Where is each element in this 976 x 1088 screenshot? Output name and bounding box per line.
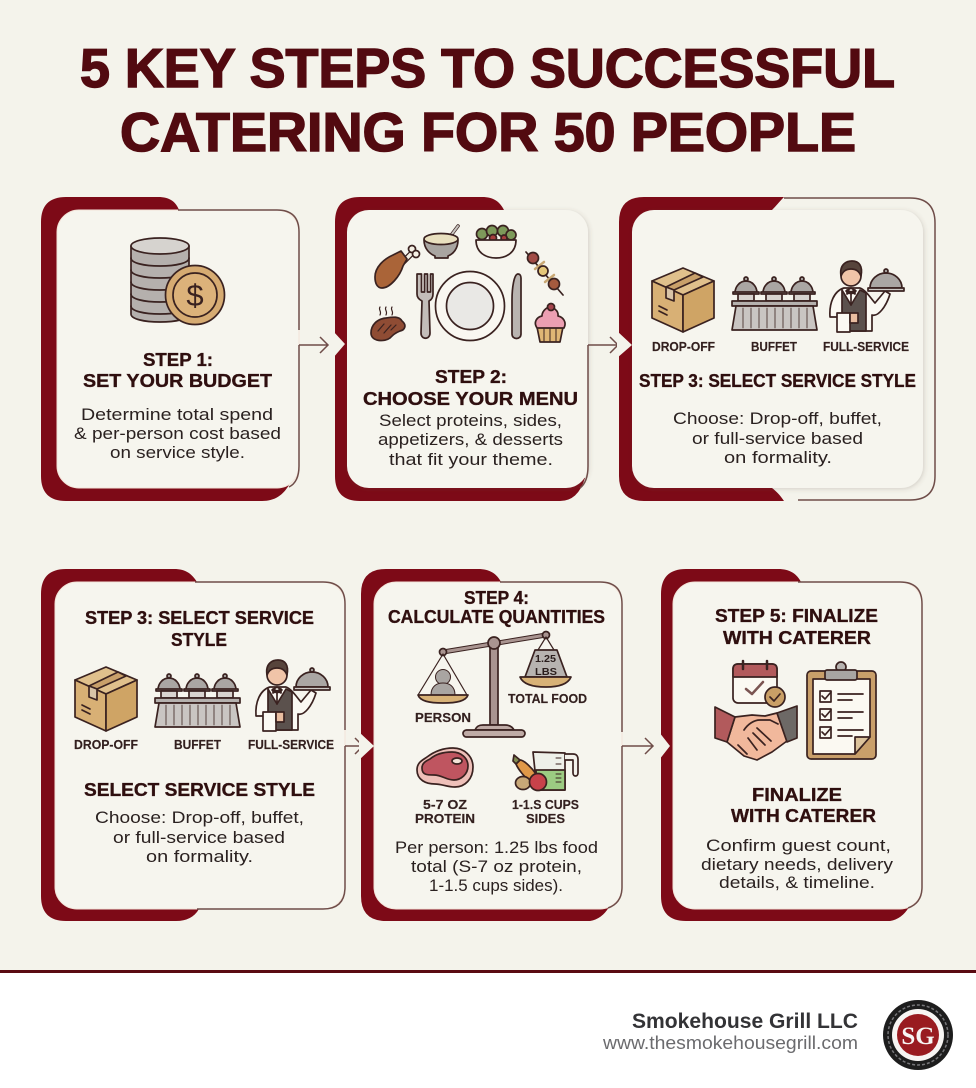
text: step 1 description: & per-person cost based [74,424,281,443]
text: company name: Smokehouse Grill LLC [632,1010,858,1033]
text: step 4 description: 1-1.5 cups sides). [429,876,563,895]
text: service style description: on formality. [146,847,253,866]
icon: skewer [526,252,563,295]
text: step 4 description: Per person: 1.25 lbs food [395,838,598,857]
heading: select service style: SELECT SERVICE STYLE [84,779,315,800]
heading: step 2: CHOOSE YOUR MENU [363,388,578,409]
heading: step 4: CALCULATE QUANTITIES [388,606,605,627]
text: step 4 description [395,838,598,895]
text: step 2 description [378,411,563,469]
text: service style description: Choose: Drop-off, buffet, [95,808,304,827]
heading: step 4: STEP 4: [464,587,529,608]
labels: service types: FULL-SERVICE [823,340,909,354]
heading: step 3 repeated: STYLE [171,629,227,650]
icon: knife [512,274,521,338]
panel: step 2 choose your menu [333,197,588,501]
labels: protein and sides: PROTEIN [415,812,475,826]
labels: protein and sides: 1-1.S CUPS [512,798,579,812]
icon: drop-off box [75,667,137,731]
labels: protein and sides: 5-7 OZ [423,798,467,812]
text: website: www.thesmokehousegrill.com [602,1033,858,1053]
heading: finalize with caterer [731,784,876,826]
labels: service types: BUFFET [174,738,221,752]
icon: coin stack: $ [186,278,204,313]
text: weight label [535,653,557,678]
arrow: step 2 to step 3 [588,337,618,353]
panel: step 5 finalize with caterer [659,569,922,921]
panel: step 3 select service style, bottom [41,569,345,921]
labels: protein and sides [415,798,579,826]
labels: service types: DROP-OFF [74,738,138,752]
icon: drop-off box [652,268,714,332]
text: step 5 description: details, & timeline. [719,873,875,892]
heading: step 2: STEP 2: [435,366,507,387]
text: step 4 description: total (S-7 oz protein, [411,857,582,876]
text: step 3 description [673,409,882,467]
text: step 5 description [701,836,894,892]
text: step 2 description: Select proteins, sides, [379,411,562,430]
heading: step 4 [388,587,605,627]
icon: buffet table [732,277,817,330]
icon: cupcake [535,304,565,342]
text: step 3 description: Choose: Drop-off, buffet, [673,409,882,428]
icon: steak [371,307,405,341]
arrow: service style to step 4 [345,738,363,754]
text: step 3 description: on formality. [724,448,832,467]
text: step 1 description: Determine total spend [81,405,273,424]
arrow: step 1 to step 2 [299,337,328,353]
title [80,37,895,163]
heading: step 3 repeated [85,607,314,650]
labels: service types: BUFFET [751,340,797,354]
icon: balance scale [418,632,571,737]
text: service style description [95,808,304,866]
heading: finalize with caterer: WITH CATERER [731,805,876,826]
text: step 2 description: that fit your theme. [389,450,553,469]
icon: handshake [715,706,797,760]
labels: service types [652,340,909,354]
text: step 1 description [74,405,281,462]
heading: step 1: SET YOUR BUDGET [83,370,273,391]
icon: company logo [883,1000,953,1070]
labels: service types: DROP-OFF [652,340,715,354]
label: total food: TOTAL FOOD [508,692,587,706]
heading: finalize with caterer: FINALIZE [752,784,842,805]
heading: step 5: STEP 5: FINALIZE [715,605,878,626]
icon: buffet table [155,674,240,727]
heading: step 3 repeated: STEP 3: SELECT SERVICE [85,607,314,628]
text: weight label: LBS [535,666,557,678]
text: weight label: 1.25 [535,653,556,665]
heading: step 5 [715,605,878,648]
icon: measuring cup with vegetables [513,752,578,790]
panel: step 3 select service style, top [617,197,935,501]
icon: company logo: SG [901,1023,935,1050]
heading: step 2 [363,366,578,409]
icon: coin stack [131,238,224,324]
icon: calendar [733,661,785,707]
text: step 5 description: dietary needs, delivery [701,855,894,874]
arrow: step 4 to step 5 [622,738,653,754]
icon: waiter [256,660,330,731]
icon: raw steak [417,748,473,787]
text: step 1 description: on service style. [110,443,245,462]
text: service style description: or full-service based [113,828,285,847]
text: step 3 description: or full-service based [692,429,863,448]
heading: step 1 [83,349,273,391]
icon: waiter [830,261,904,332]
title: 5 KEY STEPS TO SUCCESSFUL [80,37,895,99]
panel: step 1 set your budget [41,197,299,501]
title: CATERING FOR 50 PEOPLE [120,101,856,163]
icon: plate [436,272,504,340]
labels: protein and sides: SIDES [526,812,565,826]
panel: step 4 calculate quantities [359,569,622,921]
heading: step 3: STEP 3: SELECT SERVICE STYLE [639,370,916,391]
footer band [0,970,976,1088]
label: person: PERSON [415,711,471,725]
icon: salad bowl [476,226,516,258]
icon: fork [417,274,433,338]
icon: clipboard checklist [807,662,876,759]
icon: drumstick [375,246,420,288]
labels: service types: FULL-SERVICE [248,738,334,752]
text: step 5 description: Confirm guest count, [706,836,891,855]
heading: step 1: STEP 1: [143,349,213,370]
heading: step 5: WITH CATERER [723,627,871,648]
text: step 2 description: appetizers, & desserts [378,430,563,449]
icon: grain bowl [424,226,458,258]
labels: service types [74,738,334,752]
